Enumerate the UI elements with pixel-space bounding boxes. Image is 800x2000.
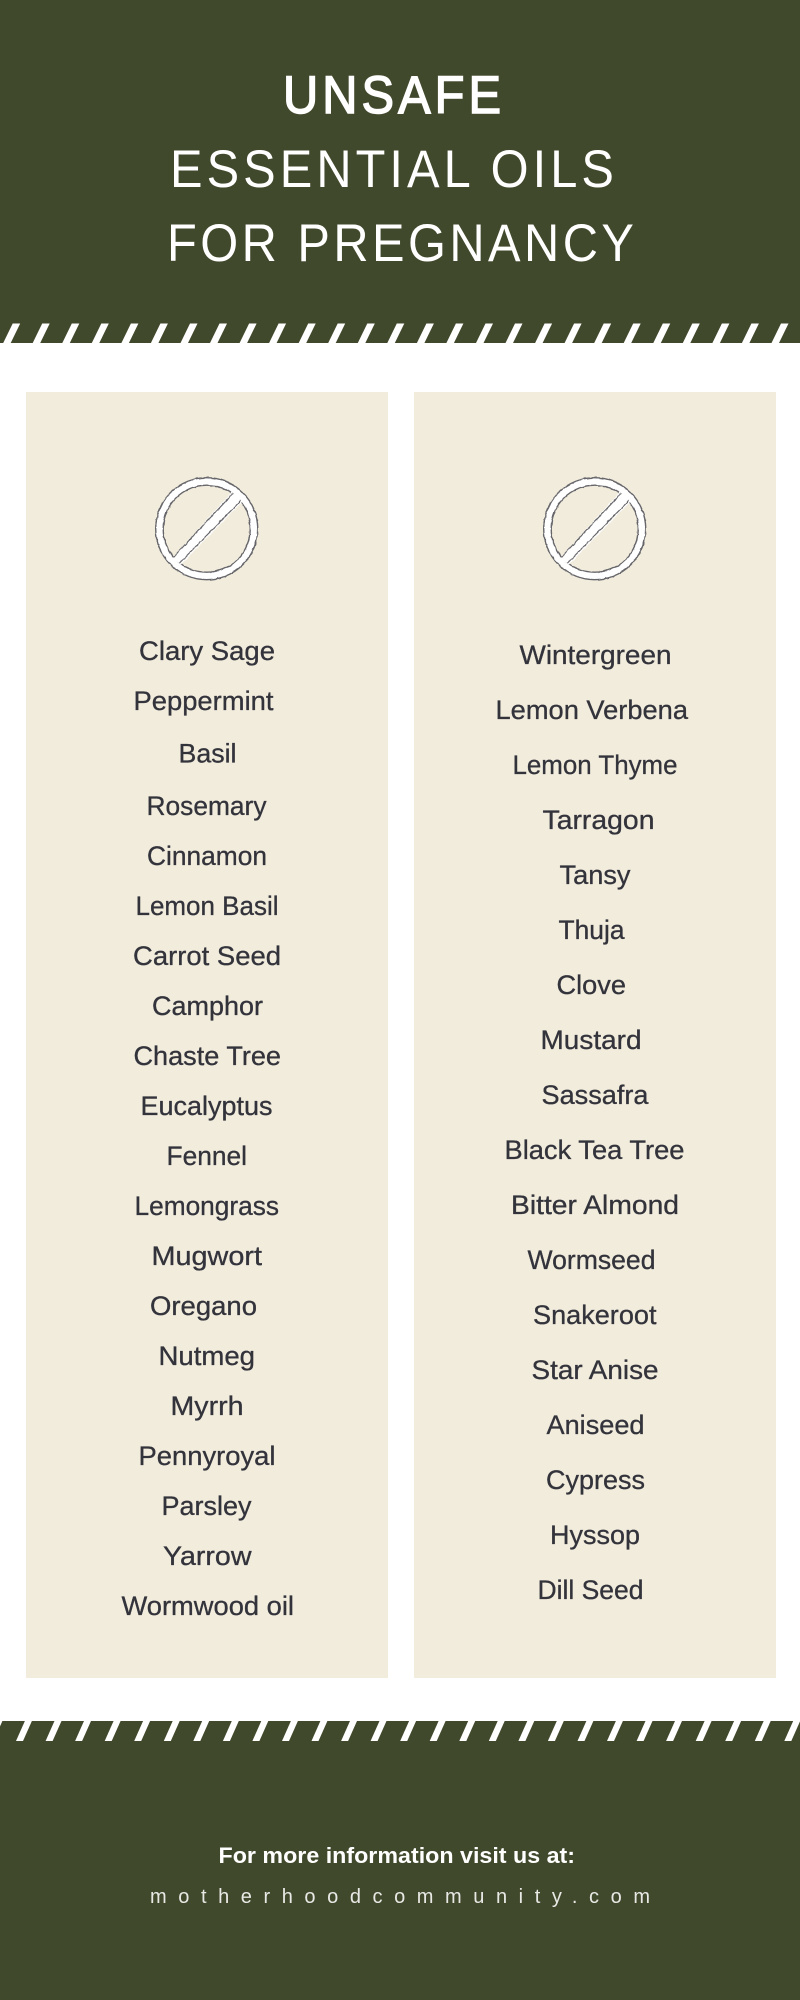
list: right oils: Lemon Thyme: [512, 750, 678, 780]
list: left oils: Rosemary: [146, 791, 267, 821]
list: right oils: Thuja: [558, 915, 625, 945]
list: right oils: Lemon Verbena: [496, 695, 688, 725]
list: right oils: Tansy: [560, 860, 631, 890]
list: right oils: Black Tea Tree: [504, 1135, 684, 1165]
list: left oils: Oregano: [150, 1291, 257, 1321]
list: right oils: Sassafra: [542, 1080, 649, 1110]
list: left oils: Parsley: [162, 1491, 252, 1521]
list: left oils: [122, 636, 294, 1621]
icon: prohibited sign left: [156, 478, 258, 580]
panel: left list: [26, 392, 388, 1678]
list: right oils: Star Anise: [532, 1355, 658, 1385]
title: [167, 65, 634, 272]
list: right oils: Bitter Almond: [511, 1190, 679, 1220]
list: left oils: Wormwood oil: [122, 1591, 294, 1621]
list: right oils: Clove: [556, 970, 626, 1000]
footer call to action: For more information visit us at:: [218, 1843, 575, 1868]
list: left oils: Pennyroyal: [138, 1441, 276, 1471]
stripes: footer edge: [0, 1721, 800, 1741]
list: left oils: Nutmeg: [158, 1341, 255, 1371]
title: UNSAFE: [283, 65, 501, 124]
list: left oils: Myrrh: [170, 1391, 244, 1421]
list: left oils: Lemon Basil: [136, 891, 278, 921]
list: right oils: Mustard: [540, 1025, 642, 1055]
footer band: [0, 1721, 800, 2000]
list: left oils: Clary Sage: [139, 636, 275, 666]
list: right oils: [496, 640, 688, 1605]
title: FOR PREGNANCY: [167, 213, 634, 272]
list: left oils: Peppermint: [134, 686, 274, 716]
list: right oils: Tarragon: [542, 805, 654, 835]
list: left oils: Chaste Tree: [134, 1041, 281, 1071]
list: left oils: Eucalyptus: [140, 1091, 272, 1121]
list: right oils: Hyssop: [550, 1520, 640, 1550]
list: left oils: Lemongrass: [134, 1191, 279, 1221]
list: right oils: Wormseed: [528, 1245, 656, 1275]
list: left oils: Carrot Seed: [133, 941, 281, 971]
panel: right list: [414, 392, 776, 1678]
list: right oils: Wintergreen: [520, 640, 672, 670]
list: left oils: Basil: [178, 738, 236, 768]
list: left oils: Mugwort: [152, 1241, 263, 1271]
stripes: header edge: [3, 324, 788, 343]
list: left oils: Fennel: [166, 1141, 247, 1171]
list: left oils: Camphor: [152, 991, 263, 1021]
list: right oils: Snakeroot: [533, 1300, 657, 1330]
list: right oils: Aniseed: [546, 1410, 644, 1440]
title: ESSENTIAL OILS: [170, 139, 614, 198]
list: left oils: Cinnamon: [147, 841, 267, 871]
icon: prohibited sign right: [544, 478, 646, 580]
footer website: motherhoodcommunity.com: [150, 1886, 650, 1908]
list: right oils: Dill Seed: [538, 1575, 644, 1605]
header band: [0, 0, 800, 343]
list: right oils: Cypress: [546, 1465, 645, 1495]
list: left oils: Yarrow: [163, 1541, 252, 1571]
